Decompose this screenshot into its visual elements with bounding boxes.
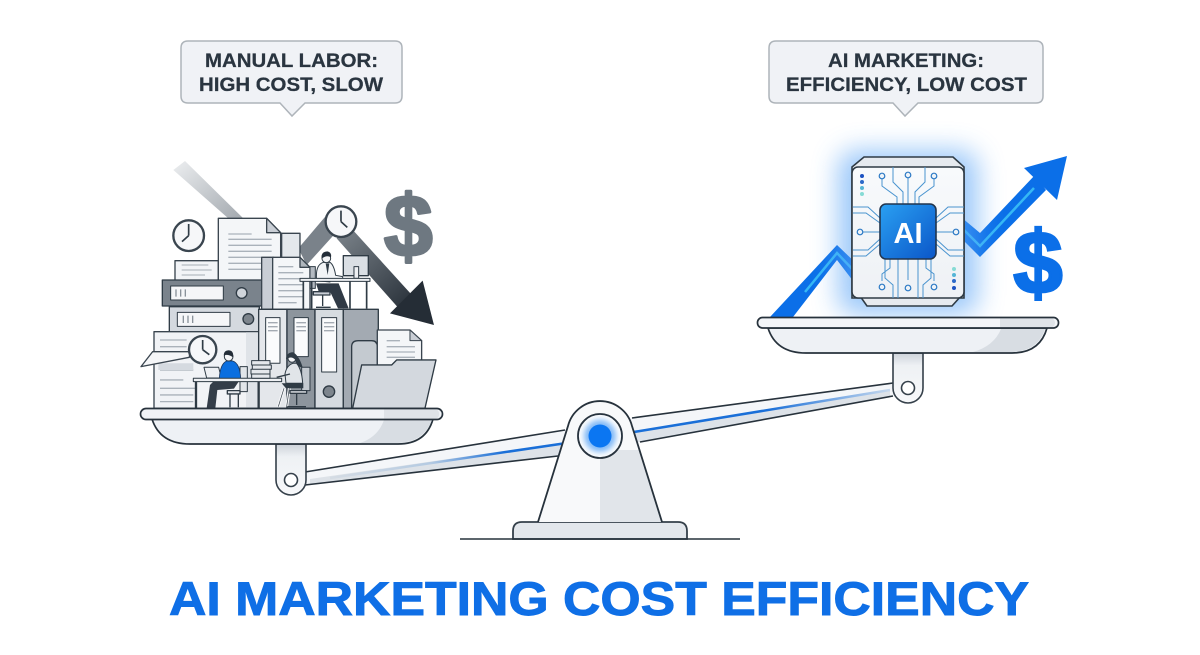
back document (175, 261, 218, 281)
icon: clock middle (189, 336, 216, 363)
icon: falling arrow (298, 215, 434, 325)
standing documents (262, 257, 310, 309)
left pan (140, 408, 442, 444)
main document (218, 218, 281, 281)
callout: manual labor: HIGH COST, SLOW (199, 75, 383, 96)
left pan hinge (276, 444, 306, 495)
AI chip (838, 150, 978, 315)
icon: faded falling arrow (173, 161, 243, 218)
fulcrum stand (460, 401, 740, 539)
icon: horizontal binder light (169, 307, 259, 332)
chip circuits (853, 167, 964, 298)
right pan (758, 318, 1058, 353)
AI chip: AI (894, 218, 922, 250)
scale beam (300, 382, 895, 486)
left scene: paperwork, people, falling arrow (141, 161, 436, 408)
document stack (141, 332, 259, 408)
title: AI MARKETING COST EFFICIENCY (169, 572, 1029, 625)
callout: AI marketing: AI MARKETING: (828, 51, 984, 72)
icon: clock left (173, 220, 204, 251)
right scene: AI chip and rising arrow (770, 150, 1067, 317)
callout: manual labor: MANUAL LABOR: (205, 51, 378, 72)
icon: clock top (326, 206, 356, 237)
upper desk with worker (300, 251, 370, 309)
vertical binders (259, 309, 378, 408)
icon: dollar sign grey: $ (384, 177, 433, 275)
callout: AI marketing (769, 41, 1043, 116)
callout: AI marketing: EFFICIENCY, LOW COST (786, 75, 1027, 96)
folder (352, 330, 436, 408)
icon: horizontal binder dark (162, 280, 266, 306)
right pan hinge (893, 353, 923, 403)
rising arrow (770, 156, 1067, 317)
callout: manual labor (181, 41, 402, 116)
icon: dollar sign blue: $ (1014, 213, 1062, 312)
lower desk with workers (193, 350, 310, 408)
